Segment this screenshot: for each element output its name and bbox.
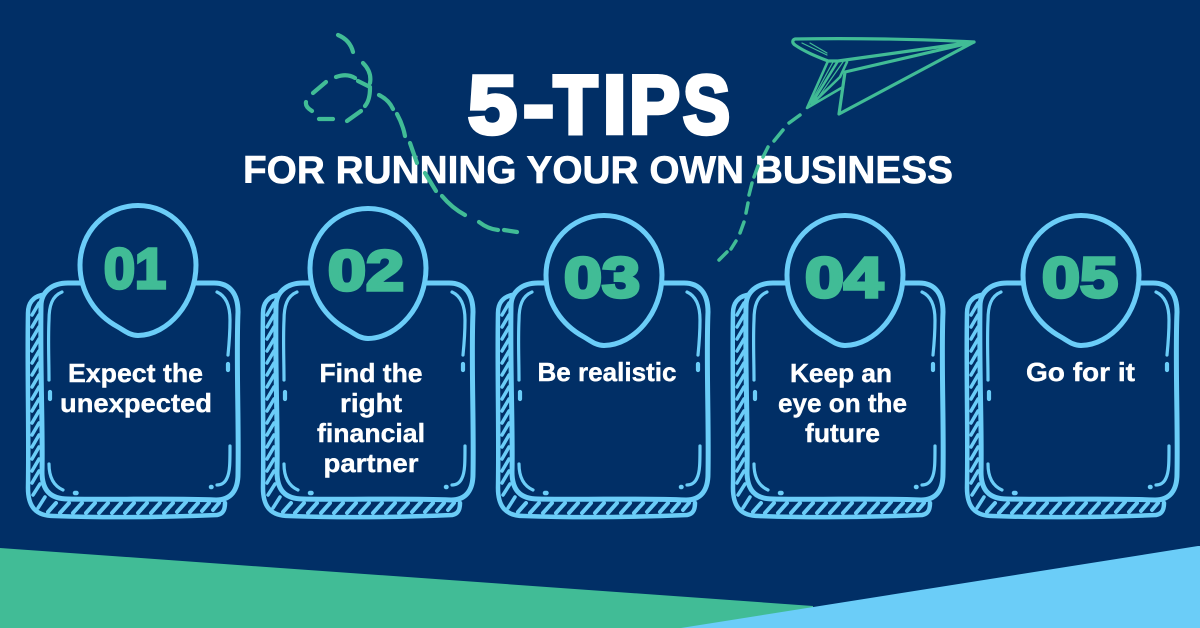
title: S: [683, 58, 730, 151]
bottom blue wedge: [681, 546, 1200, 628]
card 4 label: future: [805, 418, 880, 448]
card 2 badge: [310, 208, 426, 338]
card 5: [967, 216, 1177, 517]
card 2: [263, 208, 473, 517]
card 1 number: 01: [104, 237, 166, 301]
card 5 badge: [1023, 216, 1139, 346]
card 4 label: eye on the: [778, 388, 907, 418]
card 3 label: Be realistic: [538, 357, 676, 387]
card 1 frame: [28, 283, 238, 517]
dashed flight loop: [306, 35, 517, 232]
card 1 label: unexpected: [60, 388, 212, 418]
card 3 badge: [546, 216, 662, 346]
card 5 frame: [967, 283, 1177, 517]
subtitle: FOR RUNNING YOUR OWN BUSINESS: [243, 149, 953, 192]
card 4: [733, 216, 943, 517]
bottom green wedge: [0, 548, 813, 628]
card 4 badge: [787, 216, 903, 346]
card 3 frame: [498, 283, 708, 517]
card 2 number: 02: [328, 239, 404, 303]
title: -: [523, 58, 554, 151]
card 1: [28, 206, 238, 517]
card 4 label: [778, 358, 907, 448]
title: T: [554, 58, 598, 151]
card 4 frame: [733, 283, 943, 517]
card 2 frame: [263, 283, 473, 517]
card 3: [498, 216, 708, 517]
card 1 label: [60, 358, 212, 418]
card 2 label: financial: [317, 418, 425, 448]
icon: paper plane: [793, 39, 974, 114]
card 2 label: right: [340, 388, 402, 418]
title: P: [629, 58, 680, 151]
title: I: [603, 58, 627, 151]
title: 5: [468, 58, 517, 151]
card 4 number: 04: [805, 246, 883, 310]
card 2 label: [317, 358, 425, 478]
card 3 number: 03: [564, 246, 640, 310]
card 2 label: partner: [324, 448, 418, 478]
card 5 label: Go for it: [1026, 357, 1135, 387]
card 1 label: Expect the: [68, 358, 203, 388]
card 1 badge: [80, 206, 196, 336]
dashed plane trail: [719, 115, 800, 260]
card 5 number: 05: [1042, 246, 1118, 310]
title: [468, 58, 730, 151]
card 2 label: Find the: [320, 358, 422, 388]
card 4 label: Keep an: [790, 358, 892, 388]
